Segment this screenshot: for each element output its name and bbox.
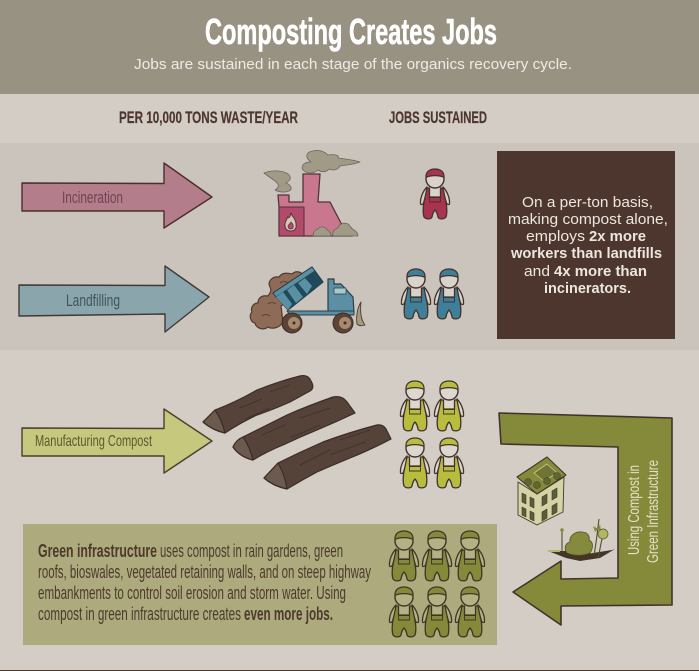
column heading: jobs sustained: JOBS SUSTAINED bbox=[389, 108, 487, 127]
callout: per-ton comparison: incinerators. bbox=[544, 280, 631, 297]
icon: dump truck with waste bbox=[250, 267, 365, 333]
text: green infrastructure description bbox=[38, 541, 371, 624]
callout: per-ton comparison: making compost alone, bbox=[508, 211, 668, 228]
callout: per-ton comparison: 4x more than bbox=[554, 263, 647, 280]
workers: incineration jobs bbox=[420, 169, 450, 219]
icon: compost logs bbox=[203, 376, 391, 489]
background: incineration and landfilling band bbox=[0, 143, 699, 350]
arrow: manufacturing compost: Manufacturing Compost bbox=[35, 433, 152, 450]
text: green infrastructure description: compost in green infrastructure creates bbox=[38, 604, 241, 624]
subtitle: Jobs are sustained in each stage of the organics recovery cycle. bbox=[134, 56, 572, 73]
callout: per-ton comparison: workers than landfills bbox=[510, 245, 662, 262]
workers: manufacturing compost jobs bbox=[400, 381, 464, 488]
callout: per-ton comparison bbox=[497, 151, 675, 339]
callout: per-ton comparison: 2x more bbox=[589, 228, 646, 245]
callout: per-ton comparison: and bbox=[524, 263, 550, 280]
arrow: incineration: Incineration bbox=[62, 188, 123, 207]
arrow: landfilling bbox=[19, 266, 209, 332]
panel: green infrastructure bbox=[23, 524, 497, 645]
footer rule bbox=[0, 670, 699, 671]
arrow: using compost in green infrastructure: Using Compost in bbox=[626, 465, 643, 555]
arrow: incineration bbox=[22, 163, 212, 228]
workers: landfilling jobs bbox=[401, 269, 464, 319]
callout: per-ton comparison: On a per-ton basis, bbox=[522, 194, 653, 211]
text: green infrastructure description: roofs, bioswales, vegetated retaining walls, and on steep highway bbox=[38, 562, 371, 582]
icon: green roof building bbox=[517, 457, 566, 525]
arrow: manufacturing compost bbox=[22, 409, 212, 473]
workers: green infrastructure jobs bbox=[389, 531, 485, 637]
text: green infrastructure description: embankments to control soil erosion and storm water. Using bbox=[38, 583, 346, 603]
title: Composting Creates Jobs bbox=[205, 11, 497, 52]
icon: incinerator factory bbox=[264, 150, 360, 236]
icon: rain garden plant bbox=[548, 519, 615, 561]
arrow: using compost in green infrastructure: Green Infrastructure bbox=[645, 460, 662, 563]
text: green infrastructure description: even more jobs. bbox=[244, 604, 333, 624]
header banner bbox=[0, 0, 699, 94]
text: green infrastructure description: Green infrastructure bbox=[38, 541, 157, 561]
text: green infrastructure description: uses compost in rain gardens, green bbox=[160, 541, 343, 561]
callout: per-ton comparison: employs bbox=[526, 228, 585, 245]
arrow: landfilling: Landfilling bbox=[66, 291, 120, 310]
column heading: per 10,000 tons: PER 10,000 TONS WASTE/YEAR bbox=[119, 108, 298, 127]
arrow: using compost in green infrastructure bbox=[499, 413, 672, 625]
